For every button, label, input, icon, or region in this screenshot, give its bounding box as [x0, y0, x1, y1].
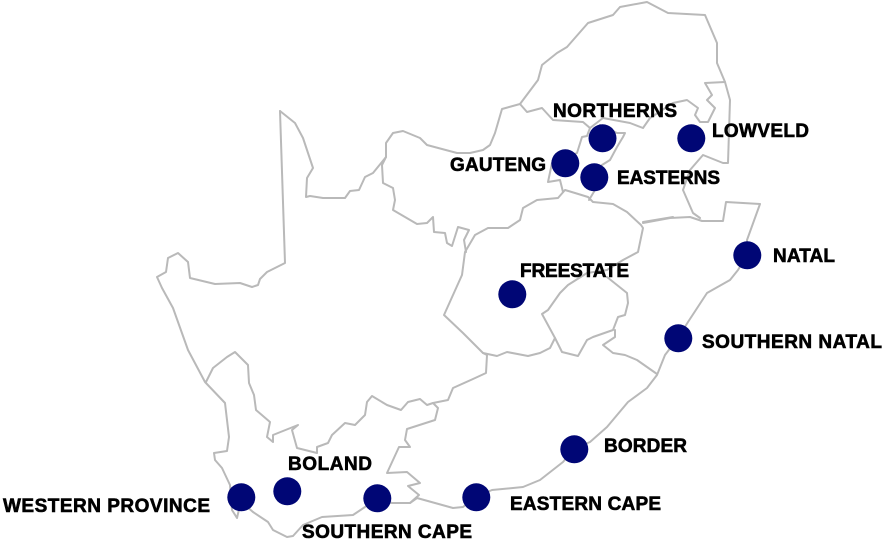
label: Boland: BOLAND: [288, 454, 372, 475]
label: Southern Natal: SOUTHERN NATAL: [702, 332, 882, 353]
label: Freestate: FREESTATE: [520, 261, 629, 282]
marker: Eastern Cape: [462, 483, 490, 511]
marker: Easterns: [580, 163, 608, 191]
marker: Western Province: [227, 483, 255, 511]
map: province outlines: [157, 2, 760, 537]
marker: Gauteng: [551, 149, 579, 177]
marker: Freestate: [498, 280, 526, 308]
marker: Natal: [733, 241, 761, 269]
label: Gauteng: GAUTENG: [450, 155, 546, 176]
label: Border: BORDER: [604, 436, 687, 457]
label: Easterns: EASTERNS: [617, 168, 720, 189]
marker: Border: [560, 435, 588, 463]
label: Lowveld: LOWVELD: [712, 121, 809, 142]
marker: Southern Natal: [664, 324, 692, 352]
marker: Northerns: [588, 124, 616, 152]
label: Natal: NATAL: [773, 246, 835, 267]
marker: Southern Cape: [363, 484, 391, 512]
label: Northerns: NORTHERNS: [553, 101, 677, 122]
marker: Boland: [273, 477, 301, 505]
label: Western Province: WESTERN PROVINCE: [3, 496, 210, 517]
label: Eastern Cape: EASTERN CAPE: [510, 494, 661, 515]
label: Southern Cape: SOUTHERN CAPE: [302, 522, 472, 543]
marker: Lowveld: [677, 124, 705, 152]
